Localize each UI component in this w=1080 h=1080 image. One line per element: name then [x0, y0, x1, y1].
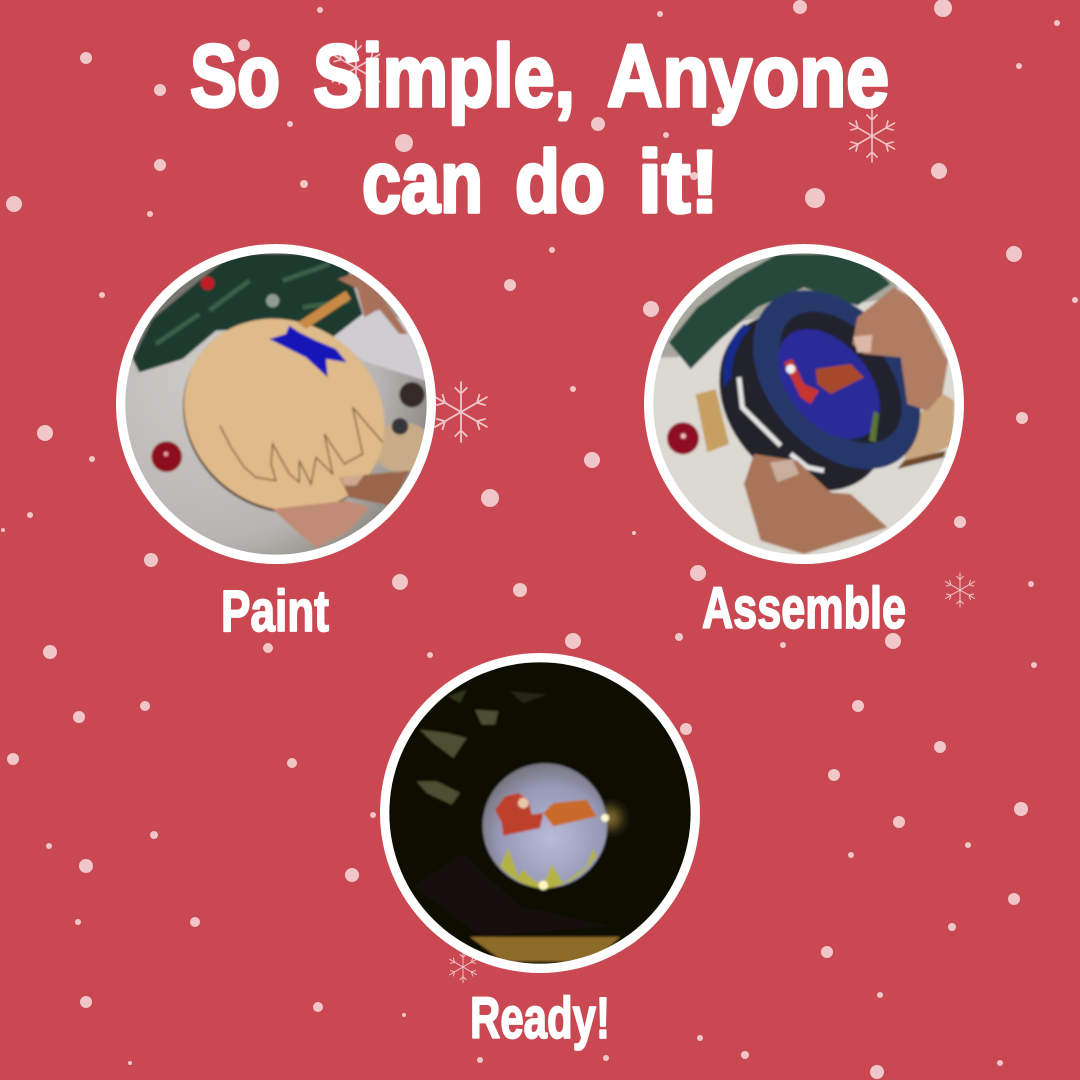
- panel: paint photo: [116, 244, 436, 564]
- blue paint: [269, 326, 347, 377]
- pine cone and wood slice: [399, 382, 425, 407]
- bauble: [151, 441, 182, 472]
- title: So: [190, 26, 280, 125]
- santa sleigh: [495, 793, 543, 836]
- front ring: [752, 288, 922, 470]
- upper hand: [852, 287, 948, 411]
- lower hand: [273, 501, 369, 548]
- wood slice: [904, 391, 954, 467]
- cork: [696, 389, 729, 452]
- label: Paint: Paint: [221, 579, 329, 644]
- tree: [669, 254, 891, 369]
- tree outlines: [220, 407, 383, 484]
- panel: ready photo: [380, 653, 700, 973]
- title: [190, 26, 889, 231]
- scene: [777, 328, 882, 440]
- wood base: [470, 937, 620, 961]
- lower hand: [744, 454, 887, 554]
- title: do: [515, 132, 605, 231]
- glowing sphere: [483, 763, 607, 888]
- bauble: [667, 422, 699, 454]
- title: it!: [638, 132, 719, 231]
- glow: [599, 807, 621, 829]
- reindeer: [543, 800, 597, 826]
- snowflakes: [332, 41, 975, 983]
- tree: [133, 254, 363, 372]
- label: Ready!: Ready!: [470, 986, 610, 1051]
- drum: [718, 318, 874, 492]
- disc: [182, 371, 372, 512]
- brush: [298, 291, 351, 329]
- label: Assemble: Assemble: [702, 576, 906, 641]
- title: Anyone: [607, 26, 889, 125]
- foliage: [417, 690, 547, 805]
- upper fingers: [338, 272, 408, 334]
- title: Simple,: [313, 26, 575, 125]
- title: can: [362, 132, 483, 231]
- panel: assemble photo: [644, 244, 964, 564]
